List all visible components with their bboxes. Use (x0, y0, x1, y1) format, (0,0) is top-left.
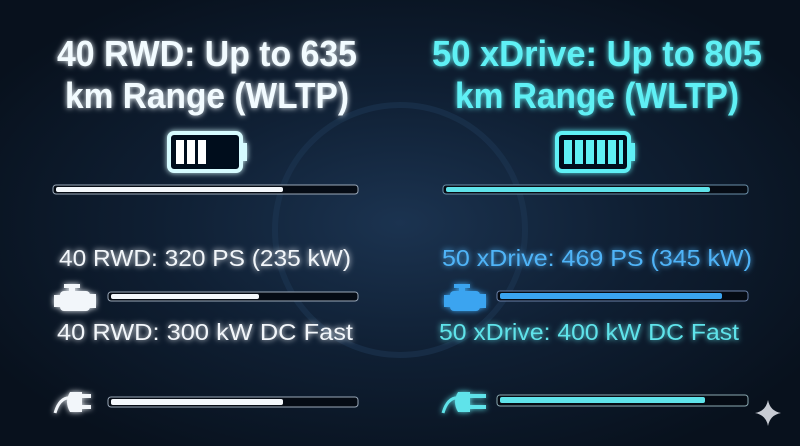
icon: plug left (55, 392, 91, 413)
icon: engine left (54, 284, 96, 311)
title: 40 RWD range (57, 33, 357, 116)
bar: range left (53, 185, 358, 194)
text: charging left: 40 RWD: 300 kW DC Fast (57, 319, 354, 345)
icon: battery left (169, 133, 247, 171)
bar: charging left (108, 397, 358, 407)
bar: power right (497, 291, 748, 301)
icon: battery right (557, 133, 635, 171)
title: 50 xDrive range (432, 33, 762, 116)
icon: engine right (444, 284, 486, 311)
text: power right: 50 xDrive: 469 PS (345 kW) (442, 245, 752, 271)
title: 50 xDrive range: km Range (WLTP) (455, 75, 739, 116)
text: power left: 40 RWD: 320 PS (235 kW) (59, 245, 351, 271)
bar: range right (443, 185, 748, 194)
title: 50 xDrive range: 50 xDrive: Up to 805 (432, 33, 762, 74)
text: charging right: 50 xDrive: 400 kW DC Fast (439, 319, 740, 345)
bar: charging right (497, 395, 748, 406)
title: 40 RWD range: 40 RWD: Up to 635 (57, 33, 357, 74)
title: 40 RWD range: km Range (WLTP) (65, 75, 349, 116)
icon: plug right (443, 392, 486, 413)
bar: power left (108, 292, 358, 301)
icon: sparkle (755, 400, 781, 426)
